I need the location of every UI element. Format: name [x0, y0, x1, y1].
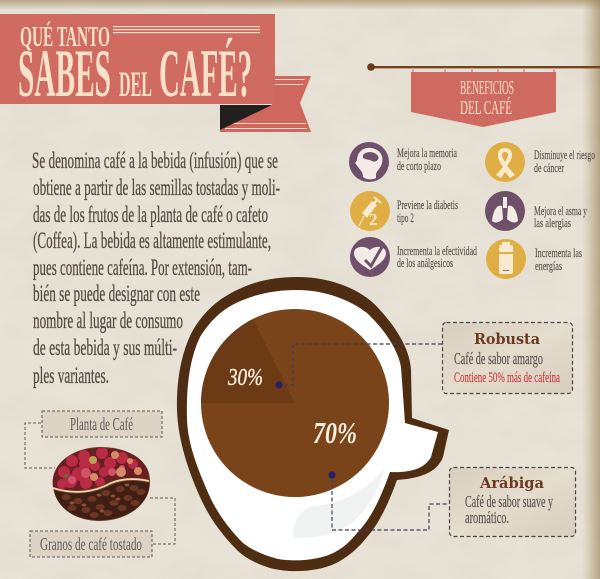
intro paragraph: pues contiene cafeína. Por extensión, tam-: [33, 255, 252, 280]
label: 70 percent: 70%: [313, 415, 357, 450]
coffee cup chart: [177, 277, 449, 571]
robusta description: Café de sabor amargo: [454, 349, 543, 368]
icon: battery: [486, 239, 526, 279]
text: diabetes: Previene la diabetis: [397, 197, 458, 212]
benefit: memory: [349, 142, 457, 182]
bean outline: [53, 447, 150, 521]
intro paragraph: Se denomina café a la bebida (infusión) que se: [32, 148, 278, 173]
text: memory: Mejora la memoria: [397, 145, 457, 160]
intro paragraph: nombre al lugar de consumo: [33, 308, 183, 333]
cup interior: [187, 290, 438, 560]
banner panel: [0, 14, 275, 104]
text: cancer: [534, 147, 595, 175]
hanging rod: [367, 63, 600, 73]
coffee bean illustration: [50, 445, 152, 522]
benefit: asthma: [485, 191, 587, 231]
intro paragraph: bién se puede designar con este: [33, 281, 200, 306]
text: energy: energías: [535, 258, 562, 273]
connector: robusta: [275, 344, 443, 389]
cup shadow: [293, 468, 385, 538]
callout: arabica: [450, 468, 576, 536]
label: 30 percent: 30%: [227, 365, 263, 391]
coffee cherries: [52, 448, 149, 490]
text: asthma: [534, 203, 587, 230]
text: diabetes: tipo 2: [397, 210, 414, 225]
callout: robusta: [442, 322, 572, 394]
robusta title: Robusta: [474, 330, 540, 348]
heading: DEL: [119, 64, 152, 104]
heading rules: [113, 26, 260, 33]
coffee pie: robusta 30 percent: [201, 319, 295, 403]
arabica title: Arábiga: [479, 474, 544, 492]
text: asthma: las alergias: [534, 215, 571, 230]
icon: syringe: 2: [369, 210, 378, 229]
cup outline: [177, 277, 449, 571]
intro paragraph: [32, 148, 280, 388]
benefits header: BENEFICIOS: [460, 77, 514, 99]
benefit: diabetes: [350, 191, 458, 231]
label: plant: [25, 411, 162, 468]
intro paragraph: de esta bebida y sus múlti-: [33, 335, 177, 360]
bean centre line: [53, 479, 149, 492]
title banner: [0, 14, 311, 132]
text: analgesics: Incrementa la efectividad: [397, 243, 477, 258]
text: energy: [535, 245, 582, 273]
heading: QUÉ TANTO: [20, 22, 110, 53]
title banner: CAFÉ?: [159, 35, 252, 111]
benefit: cancer: [485, 142, 595, 182]
label: roasted beans: [30, 498, 175, 557]
ribbon tail: [220, 76, 311, 132]
benefit: analgesics: [350, 237, 477, 277]
heading: SABES: [18, 35, 111, 111]
icon: ribbon: [485, 142, 525, 182]
label: roasted beans: Granos de café tostado: [40, 534, 142, 554]
text: analgesics: de los análgesicos: [397, 255, 453, 270]
text: memory: [397, 145, 457, 173]
benefits heading: [460, 77, 514, 119]
icon: head with brain: [349, 142, 389, 182]
text: diabetes: [397, 197, 458, 225]
connector: arabica: [328, 471, 449, 530]
benefits header: [367, 63, 600, 127]
icon: lungs: [485, 191, 525, 231]
intro paragraph: (Coffea). La bebida es altamente estimulante,: [33, 228, 271, 253]
arabica description: aromático.: [465, 508, 509, 527]
coffee pie: arabica 70 percent: [201, 309, 389, 497]
intro paragraph: obtiene a partir de las semillas tostadas y moli-: [33, 175, 280, 200]
arabica description: [465, 492, 553, 527]
roasted beans: [54, 481, 149, 520]
label: plant: Planta de Café: [70, 414, 133, 434]
benefits heading: DEL CAFÉ: [460, 96, 512, 119]
benefits banner: [411, 72, 556, 127]
text: cancer: de cáncer: [534, 160, 564, 175]
intro paragraph: ples variantes.: [33, 363, 109, 388]
text: analgesics: [397, 243, 477, 270]
text: memory: de corto plazo: [397, 158, 441, 173]
intro paragraph: das de los frutos de la planta de café o cafeto: [33, 202, 268, 227]
icon: heart with check: [350, 237, 390, 277]
benefit: energy: [486, 239, 582, 279]
